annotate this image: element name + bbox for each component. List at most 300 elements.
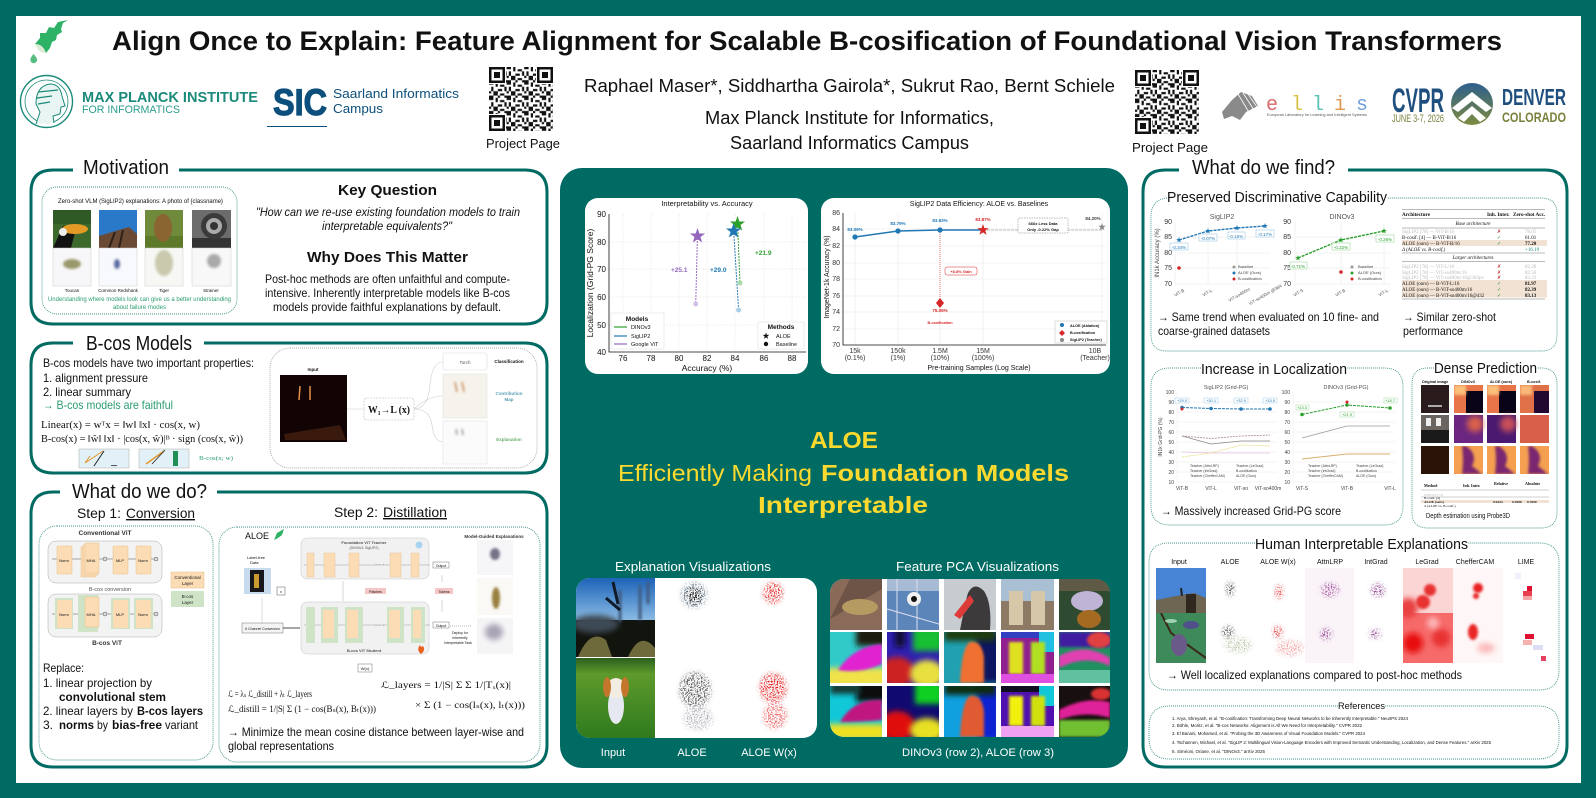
- table: zero-shot accuracy: ✗: [1497, 229, 1501, 235]
- table: zero-shot accuracy: SigLIP2 [78] — ViT-B/16: [1402, 230, 1455, 235]
- logo: Saarland Informatics Campus: [267, 82, 460, 127]
- table: zero-shot accuracy: B-cosif. [4] — B-ViT-B/16: [1402, 236, 1457, 241]
- table: depth results: 0.7690: [1527, 500, 1537, 504]
- text: properties: [43, 356, 254, 412]
- table: depth results: Relative: [1494, 481, 1508, 486]
- chart: data efficiency: 75.05%: [932, 308, 948, 313]
- table: depth results: 0.9424: [1493, 500, 1503, 504]
- diagram: foundation ViT teacher: (DINOv3, SigLIP2): [350, 546, 378, 550]
- chart: SigLIP2 accuracy: -0.17%: [1258, 232, 1272, 237]
- diagram: foundation ViT teacher: Foundation ViT Teacher: [341, 540, 387, 545]
- text: replace list: convolutional stem: [59, 690, 166, 704]
- chart: SigLIP2 accuracy: 85: [1164, 234, 1172, 241]
- table: depth results: 0.2980: [1512, 500, 1522, 504]
- chart: DINOv3 Grid-PG: ALOE (Ours): [1356, 474, 1376, 478]
- table: zero-shot accuracy: 82.39: [1525, 288, 1537, 293]
- legend: methods: Methods: [768, 324, 795, 331]
- chart: SigLIP2 Grid-PG: SigLIP2 (Grid-PG): [1204, 385, 1248, 391]
- chart: DINOv3 Grid-PG: ViT-B: [1341, 486, 1354, 492]
- logo: Saarland Informatics Campus: SIC: [273, 82, 327, 123]
- diagram: B-cos ViT student: W(x): [361, 666, 370, 671]
- chart: SigLIP2 Grid-PG: [1158, 385, 1281, 492]
- table: zero-shot accuracy: Architecture: [1402, 212, 1431, 218]
- chart: SigLIP2 accuracy: ViT-so400m @384: [1248, 283, 1283, 306]
- chart: interpretability vs accuracy: 50: [597, 321, 607, 330]
- labels: methods: ChefferCAM: [1456, 559, 1494, 566]
- chart: data efficiency: (0.1%): [845, 355, 865, 362]
- title: Align Once to Explain: Feature Alignment for Scalable B-cosification of Foundational Vision Transformers: [112, 26, 1502, 56]
- chart: SigLIP2 Grid-PG: ViT-so: [1234, 486, 1248, 492]
- chart: interpretability vs accuracy: 90: [597, 210, 607, 219]
- diagram: B-cos explanation: Explanation: [496, 437, 522, 442]
- table: zero-shot accuracy: ✓: [1497, 235, 1501, 241]
- text: replace list: [43, 661, 203, 732]
- affiliation: [705, 108, 994, 153]
- table: zero-shot accuracy: ✓: [1497, 287, 1501, 293]
- images: input row: [53, 210, 231, 248]
- chart: data efficiency: 666x Less Data: [1029, 221, 1058, 226]
- icon: cosine vectors: B-cos(x; w): [199, 455, 233, 462]
- chart: data efficiency: 1.5M: [932, 348, 948, 355]
- labels: methods: [1171, 559, 1534, 566]
- chart: DINOv3 accuracy: 80: [1283, 250, 1291, 257]
- chart: interpretability vs accuracy: Localization (Grid-PG Score): [585, 229, 595, 337]
- text: minimize distance: global representations: [228, 739, 334, 753]
- logo: CVPR Denver Colorado: JUNE 3-7, 2026: [1392, 113, 1444, 125]
- chart: interpretability vs accuracy: Accuracy (%): [682, 363, 732, 373]
- chart: DINOv3 accuracy: -0.71%: [1291, 264, 1305, 269]
- sub-panel: dense prediction: ALOE (ours): [1490, 380, 1513, 384]
- diagram: B-cos ViT student: Deploy for: [452, 631, 469, 635]
- text: key question: [256, 182, 520, 233]
- legend: layer types: B-cos: [182, 594, 194, 599]
- text: reference list: 5. Siméoni, Oriane, et al. "DINOv3." arXiv 2025: [1172, 749, 1265, 754]
- chart: DINOv3 accuracy: DINOv3: [1330, 214, 1355, 221]
- chart: data efficiency: 72: [832, 326, 840, 333]
- chart: SigLIP2 Grid-PG: Teacher (IntGrad): [1190, 469, 1217, 473]
- chart: DINOv3 Grid-PG: 60: [1284, 430, 1290, 436]
- label: ALOE: ALOE: [245, 531, 269, 541]
- chart: interpretability vs accuracy: [585, 198, 808, 374]
- caption: PCA rows: DINOv3 (row 2), ALOE (row 3): [902, 747, 1054, 759]
- logo: Saarland Informatics Campus: Campus: [333, 101, 384, 116]
- label: ALOE: [245, 529, 284, 541]
- text: same trend: coarse-grained datasets: [1158, 324, 1270, 338]
- table: zero-shot accuracy: +16.19: [1525, 248, 1540, 253]
- chart: interpretability vs accuracy: 82: [703, 354, 712, 363]
- diagram: B-cos explanation: Map: [504, 397, 514, 402]
- labels: methods: Input: [1171, 559, 1187, 566]
- text: key question: "How can we re-use existing foundation models to train: [256, 205, 520, 219]
- sub-panel: zero-shot explanations: Tiger: [159, 288, 170, 293]
- icon: cosine vectors: [79, 449, 233, 468]
- formulas: Linear(x) = wᵀx = ‖w‖ ‖x‖ · cos(x, w): [41, 420, 200, 431]
- table: zero-shot accuracy: Inh. Inter.: [1487, 212, 1510, 218]
- legend: methods: Baseline: [776, 342, 797, 348]
- text: replace list: 1. linear projection by: [43, 676, 152, 690]
- table: zero-shot accuracy: 61.01: [1525, 236, 1537, 241]
- chart: data efficiency: B-cosification: [927, 321, 953, 325]
- diagram: B-cos explanation: [270, 348, 537, 468]
- text: depth estimation: Depth estimation using Probe3D: [1426, 513, 1510, 520]
- affiliation: Max Planck Institute for Informatics,: [705, 108, 994, 128]
- labels: methods: IntGrad: [1364, 559, 1388, 566]
- table: zero-shot accuracy: [1401, 210, 1547, 299]
- table: depth results: Method: [1424, 483, 1438, 488]
- table: zero-shot accuracy: ✓: [1497, 293, 1501, 299]
- text: key question: interpretable equivalents?": [322, 219, 453, 233]
- panel: motivation: [31, 157, 547, 324]
- chart: SigLIP2 Grid-PG: ViT-B: [1176, 486, 1189, 492]
- text: properties: B-cos models have two important properties:: [43, 356, 254, 370]
- captions: explanation columns: [601, 747, 797, 759]
- chart: data efficiency: 10B: [1089, 348, 1102, 355]
- sub-panel: zero-shot explanations: Common Redshank: [98, 288, 139, 293]
- chart: DINOv3 accuracy: ViT-L: [1377, 288, 1389, 297]
- chart: interpretability vs accuracy: 70: [597, 265, 607, 274]
- table: depth results: ALOE (ours): [1424, 500, 1445, 504]
- chart: data efficiency: Pre-training Samples (Log Scale): [927, 365, 1031, 372]
- headline: ALOE: Interpretable: [758, 492, 928, 518]
- diagram: B-cos explanation: Classification: [494, 359, 524, 364]
- chart: SigLIP2 accuracy: -0.15%: [1229, 234, 1243, 239]
- legend: layer types: Layer: [182, 600, 194, 605]
- chart: data efficiency: 83.09%: [847, 227, 863, 232]
- chart: interpretability vs accuracy: +21.9: [755, 250, 772, 257]
- diagram: input: Data: [250, 560, 259, 565]
- logo: ellis: [1222, 92, 1368, 120]
- formulas: [41, 420, 243, 445]
- diagram: B-cos ViT: Norm: [138, 612, 149, 617]
- text: replace list: by: [97, 718, 108, 732]
- chart: DINOv3 Grid-PG: 40: [1284, 450, 1290, 456]
- diagram: token losses: Tokens: [438, 590, 450, 594]
- chart: DINOv3 Grid-PG: DINOv3 (Grid-PG): [1324, 385, 1369, 391]
- chart: interpretability vs accuracy: 78: [647, 354, 656, 363]
- text: reference list: [1172, 716, 1491, 754]
- logo: CVPR Denver Colorado: DENVER: [1502, 84, 1566, 110]
- diagram: B-cos ViT student: Interpretable Task: [444, 641, 472, 645]
- chart: data efficiency: 15k: [849, 348, 861, 355]
- text: reference list: 3. El Banani, Mohamed, et al. "Probing the 3D Awareness of Visual Foundation Models." CVPR 2024: [1172, 731, 1365, 736]
- chart: DINOv3 Grid-PG: 100: [1282, 390, 1290, 396]
- table: zero-shot accuracy: 82.56: [1525, 271, 1537, 276]
- chart: SigLIP2 Grid-PG: Teacher (LeGrad): [1236, 464, 1263, 468]
- diagram: B-cos ViT student: [301, 602, 472, 672]
- diagram: conventional ViT: Conventional ViT: [79, 530, 132, 537]
- chart: SigLIP2 Grid-PG: +32.9: [1236, 398, 1247, 403]
- chart: DINOv3 accuracy: ViT-S: [1292, 288, 1304, 298]
- diagram: B-cos explanation: Input: [308, 367, 319, 372]
- text: key question: Key Question: [338, 182, 437, 199]
- logo: Max Planck Institute for Informatics: [20, 76, 258, 128]
- diagram: conventional ViT: MLP: [116, 558, 124, 563]
- headline: ALOE: [618, 427, 1069, 518]
- chart: interpretability vs accuracy: 88: [788, 354, 797, 363]
- chart: SigLIP2 Grid-PG: 80: [1168, 410, 1174, 416]
- table: depth results: B-cosif. [4]: [1424, 496, 1440, 500]
- chart: interpretability vs accuracy: 76: [619, 354, 628, 363]
- diagram: foundation ViT teacher: · · ·: [375, 562, 384, 568]
- chart: DINOv3 Grid-PG: ViT-L: [1384, 486, 1396, 492]
- legend: models: Google ViT: [631, 342, 659, 348]
- diagram: input: Label-free: [247, 555, 266, 560]
- step 1 heading: Conversion: [126, 505, 195, 521]
- text: why does this matter: intensive. Inherently interpretable models like B-cos: [265, 286, 510, 300]
- step 2 heading: Step 2:: [334, 504, 378, 520]
- chart: SigLIP2 accuracy: [1155, 214, 1283, 306]
- captions: explanation columns: ALOE W(x): [741, 747, 797, 759]
- chart: SigLIP2 accuracy: Baseline: [1238, 264, 1254, 269]
- text: zero-shot performance: [1403, 310, 1497, 338]
- table: zero-shot accuracy: ✗: [1497, 264, 1501, 270]
- panel: central ALOE results: [560, 168, 1128, 768]
- sub-panel: zero-shot explanations: Strainer: [203, 288, 219, 293]
- text: minimize distance: [228, 725, 524, 753]
- chart: data efficiency: (10%): [931, 355, 949, 362]
- table: zero-shot accuracy: 81.97: [1525, 282, 1537, 287]
- images: depth maps: [1421, 385, 1549, 474]
- text: reference list: 2. Böhle, Moritz, et al. "B-cos Networks: Alignment is All We Need for Interpretability." CVPR 2022: [1172, 723, 1362, 728]
- chart: DINOv3 Grid-PG: Teacher (LeGrad): [1356, 464, 1383, 468]
- heading: what do we find: What do we find?: [1192, 157, 1335, 179]
- diagram: B-cos ViT: B-cos ViT: [92, 640, 122, 647]
- logo: CVPR Denver Colorado: [1392, 82, 1566, 125]
- chart: SigLIP2 accuracy: -0.07%: [1201, 236, 1215, 241]
- legend: models: DINOv3: [631, 325, 651, 331]
- text: properties: 2. linear summary: [43, 385, 131, 399]
- diagram: input: [242, 555, 300, 633]
- logo: ellis: l: [1312, 94, 1324, 117]
- logo: Max Planck Institute for Informatics: FOR INFORMATICS: [82, 104, 180, 116]
- chart: SigLIP2 Grid-PG: 100: [1166, 390, 1174, 396]
- heading: preserved capability: Preserved Discriminative Capability: [1167, 189, 1387, 206]
- chart: SigLIP2 Grid-PG: Teacher (ChefferCAM): [1190, 474, 1225, 478]
- chart: data efficiency: (1%): [891, 355, 905, 362]
- text: zero-shot performance: → Similar zero-shot: [1403, 310, 1497, 324]
- chart: data efficiency: 76: [832, 293, 840, 300]
- text: replace list: norms: [59, 718, 94, 732]
- chart: DINOv3 accuracy: 70: [1283, 281, 1291, 288]
- chart: interpretability vs accuracy: 40: [597, 348, 607, 357]
- sub-panel: zero-shot explanations: [42, 187, 237, 314]
- table: zero-shot accuracy: SigLIP2 [78] — ViT-L/16: [1402, 265, 1455, 270]
- formulas: distillation loss: [228, 680, 525, 714]
- text: massively increased: → Massively increased Grid-PG score: [1161, 504, 1341, 518]
- chart: data efficiency: 84.20%: [1085, 216, 1101, 221]
- table: zero-shot accuracy: 83.33: [1525, 276, 1537, 281]
- table: depth results: Absolute: [1525, 481, 1540, 486]
- sub-panel: references: [1149, 701, 1559, 759]
- chart: interpretability vs accuracy: 80: [675, 354, 684, 363]
- diagram: B-cos ViT student: B-cos ViT Student: [347, 648, 382, 653]
- table: zero-shot accuracy: ALOE (ours) — B-ViT-L/16: [1402, 282, 1460, 287]
- headline: ALOE: Foundation Models: [821, 460, 1069, 486]
- chart: DINOv3 accuracy: -0.22%: [1334, 245, 1348, 250]
- chart: data efficiency: 84: [832, 226, 840, 233]
- diagram: token losses: Patches: [369, 590, 382, 594]
- chart: interpretability vs accuracy: Interpretability vs. Accuracy: [661, 199, 753, 208]
- table: zero-shot accuracy: ✓: [1497, 241, 1501, 247]
- chart: SigLIP2 Grid-PG: 20: [1168, 470, 1174, 476]
- chart: SigLIP2 Grid-PG: 70: [1168, 420, 1174, 426]
- sub-panel: dense prediction: DINOv3: [1461, 380, 1475, 384]
- chart: data efficiency: 83.83%: [932, 218, 948, 223]
- affiliation: Saarland Informatics Campus: [730, 133, 969, 153]
- table: zero-shot accuracy: ALOE (ours) — B-ViT-B/16: [1402, 242, 1460, 247]
- chart: DINOv3 Grid-PG: +23.3: [1297, 405, 1308, 410]
- chart: DINOv3 Grid-PG: B-cosification: [1356, 469, 1377, 473]
- formulas: distillation loss: × Σ (1 − cos(lₛ(x), lₜ(x))): [415, 700, 525, 710]
- chart: DINOv3 Grid-PG: Teacher (IntGrad): [1308, 469, 1335, 473]
- chart: SigLIP2 Grid-PG: ViT-L: [1205, 486, 1217, 492]
- heading: feature PCA visualizations: Feature PCA Visualizations: [896, 559, 1060, 574]
- chart: DINOv3 Grid-PG: +21.9: [1342, 412, 1353, 417]
- table: zero-shot accuracy: 77.20: [1525, 242, 1537, 247]
- chart: SigLIP2 Grid-PG: 50: [1168, 440, 1174, 446]
- panel: B-cos models: [31, 333, 547, 473]
- chart: data efficiency: (Teacher): [1080, 355, 1110, 362]
- logo: Saarland Informatics Campus: Saarland Informatics: [333, 86, 460, 101]
- chart: SigLIP2 accuracy: -0.34%: [1172, 245, 1186, 250]
- chart: SigLIP2 Grid-PG: +30.1: [1206, 398, 1217, 403]
- sub-panel: increase in localization: [1151, 361, 1403, 525]
- diagram: B-cos ViT: MLP: [116, 612, 124, 617]
- table: depth results: DINOv3 [73]: [1424, 493, 1443, 497]
- sub-panel: dense prediction: [1412, 360, 1557, 528]
- chart: data efficiency: 86: [832, 210, 840, 217]
- captions: explanation columns: Input: [601, 747, 625, 759]
- chart: DINOv3 accuracy: [1283, 214, 1394, 298]
- headline: ALOE: ALOE: [810, 427, 878, 453]
- images: model-guided explanations: Model-Guided Explanations: [464, 534, 524, 539]
- chart: data efficiency: Only -0.22% Gap: [1027, 227, 1059, 232]
- chart: data efficiency: [821, 198, 1110, 374]
- logo: ellis: i: [1334, 94, 1346, 117]
- formulas: distillation loss: ℒ_layers = 1/|S| Σ Σ 1/|Tₓ(x)|: [381, 680, 511, 690]
- text: properties: 1. alignment pressure: [43, 371, 148, 385]
- diagram: B-cos ViT student: Output: [436, 624, 446, 628]
- chart: DINOv3 Grid-PG: 30: [1284, 460, 1290, 466]
- chart: SigLIP2 Grid-PG: 60: [1168, 430, 1174, 436]
- logo: ellis: e: [1266, 94, 1278, 117]
- sub-panel: preserved discriminative capability: [1151, 189, 1557, 351]
- chart: SigLIP2 Grid-PG: IN1k Grid-PG (%): [1158, 417, 1164, 457]
- table: zero-shot accuracy: 78.05: [1525, 230, 1537, 235]
- table: zero-shot accuracy: SigLIP2 [78] — ViT-so400m/16: [1402, 271, 1467, 276]
- chart: SigLIP2 accuracy: ViT-B: [1173, 288, 1185, 298]
- legend: methods: [758, 322, 804, 349]
- legend: layer types: Conventional: [174, 575, 201, 580]
- chart: SigLIP2 Grid-PG: 10: [1168, 480, 1174, 486]
- chart: SigLIP2 Grid-PG: 40: [1168, 450, 1174, 456]
- chart: SigLIP2 accuracy: ViT-L: [1201, 288, 1213, 297]
- table: zero-shot accuracy: ✓: [1497, 281, 1501, 287]
- table: zero-shot accuracy: Δ (ALOE vs. B-cosif.): [1401, 248, 1446, 253]
- table: depth results: Δ (ALOE vs. B-cosif.): [1424, 504, 1456, 508]
- chart: data efficiency: 80: [832, 260, 840, 267]
- table: zero-shot accuracy: Larger architectures: [1452, 256, 1494, 261]
- labels: methods: LIME: [1518, 559, 1534, 566]
- table: zero-shot accuracy: ✗: [1497, 275, 1501, 281]
- chart: SigLIP2 accuracy: ALOE (Ours): [1238, 270, 1262, 275]
- chart: DINOv3 Grid-PG: Teacher (ChefferCAM): [1308, 474, 1343, 478]
- chart: DINOv3 Grid-PG: ViT-S: [1296, 486, 1309, 492]
- chart: DINOv3 accuracy: B-cosification: [1358, 276, 1382, 281]
- legend: layer types: [171, 572, 204, 607]
- text: reference list: 1. Arya, Shreyash, et al. "B-cosification: Transforming Deep Neural Networks to be Inherently Interpretable." NeurIPS 2024: [1172, 716, 1408, 721]
- QR code: project page right: Project Page: [1132, 140, 1208, 155]
- chart: interpretability vs accuracy: 84: [731, 354, 740, 363]
- labels: methods: AttnLRP: [1317, 559, 1343, 566]
- step 1 heading: Step 1:: [77, 505, 121, 521]
- logo: ellis: l: [1291, 94, 1303, 117]
- diagram: B-cos explanation: Torch: [459, 360, 471, 365]
- chart: DINOv3 Grid-PG: 20: [1284, 470, 1290, 476]
- labels: methods: ALOE W(x): [1260, 559, 1296, 566]
- logo: ellis: European Laboratory for Learning and Intelligent Systems: [1267, 112, 1367, 117]
- chart: data efficiency: SigLIP2 Data Efficiency: ALOE vs. Baselines: [910, 201, 1049, 208]
- text: replace list: 2. linear layers by: [43, 704, 133, 718]
- captions: explanation columns: ALOE: [677, 747, 707, 759]
- sub-panel: zero-shot explanations: about failure modes: [113, 304, 167, 311]
- legend: methods: ALOE: [776, 334, 791, 340]
- diagram: conventional ViT: MHA: [87, 558, 96, 563]
- chart: data efficiency: 74: [832, 309, 840, 316]
- text: replace list: B-cos layers: [137, 704, 203, 718]
- panel: what do we find: [1143, 157, 1567, 767]
- heading: motivation: Motivation: [83, 157, 169, 179]
- diagram: B-cos ViT: MHA: [87, 612, 96, 617]
- sub-panel: step 2 distillation: [219, 527, 540, 762]
- chart: DINOv3 Grid-PG: [1282, 385, 1397, 492]
- authors: Raphael Maser*, Siddhartha Gairola*, Sukrut Rao, Bernt Schiele: [584, 76, 1115, 96]
- chart: DINOv3 accuracy: 85: [1283, 234, 1291, 241]
- logo: ellis: s: [1356, 94, 1368, 117]
- chart: SigLIP2 Grid-PG: Teacher (AttnLRP): [1190, 464, 1219, 468]
- chart: data efficiency: ImageNet-1k Accuracy (%): [824, 235, 831, 319]
- sub-panel: dense prediction: Original image: [1422, 380, 1448, 384]
- diagram: B-cos ViT: Norm: [59, 612, 70, 617]
- chart: SigLIP2 Grid-PG: ALOE (Ours): [1236, 474, 1256, 478]
- chart: data efficiency: 82: [832, 243, 840, 250]
- chart: SigLIP2 Grid-PG: +29.0: [1177, 398, 1188, 403]
- chart: interpretability vs accuracy: 86: [760, 354, 769, 363]
- sub-panel: zero-shot explanations: Understanding where models look can give us a better understanding: [48, 296, 231, 303]
- heading: references: References: [1338, 701, 1386, 711]
- chart: DINOv3 Grid-PG: 70: [1284, 420, 1290, 426]
- chart: SigLIP2 accuracy: 70: [1164, 281, 1172, 288]
- sub-panel: human interpretable explanations: [1149, 536, 1559, 690]
- diagram: B-cos explanation: Contribution: [496, 391, 523, 396]
- chart: data efficiency: 83.79%: [890, 221, 906, 226]
- logo: Max Planck Institute for Informatics: MAX PLANCK INSTITUTE: [82, 89, 258, 106]
- table: zero-shot accuracy: Zero-shot Acc.: [1513, 212, 1546, 218]
- images: explanation comparison: [1156, 568, 1550, 663]
- panel: what do we do: [31, 481, 547, 767]
- chart: data efficiency: (100%): [972, 355, 994, 362]
- labels: methods: ALOE: [1221, 559, 1240, 566]
- text: well localized: → Well localized explanations compared to post-hoc methods: [1167, 668, 1462, 682]
- logo: CVPR Denver Colorado: COLORADO: [1502, 109, 1566, 125]
- step 2 heading: [334, 504, 447, 520]
- diagram: B-cos ViT student: inherently: [452, 636, 468, 640]
- chart: SigLIP2 accuracy: IN1k Accuracy (%): [1155, 228, 1161, 278]
- chart: DINOv3 Grid-PG: 10: [1284, 480, 1290, 486]
- chart: SigLIP2 accuracy: 75: [1164, 265, 1172, 272]
- text: replace list: Replace:: [43, 661, 84, 675]
- chart: SigLIP2 accuracy: 80: [1164, 250, 1172, 257]
